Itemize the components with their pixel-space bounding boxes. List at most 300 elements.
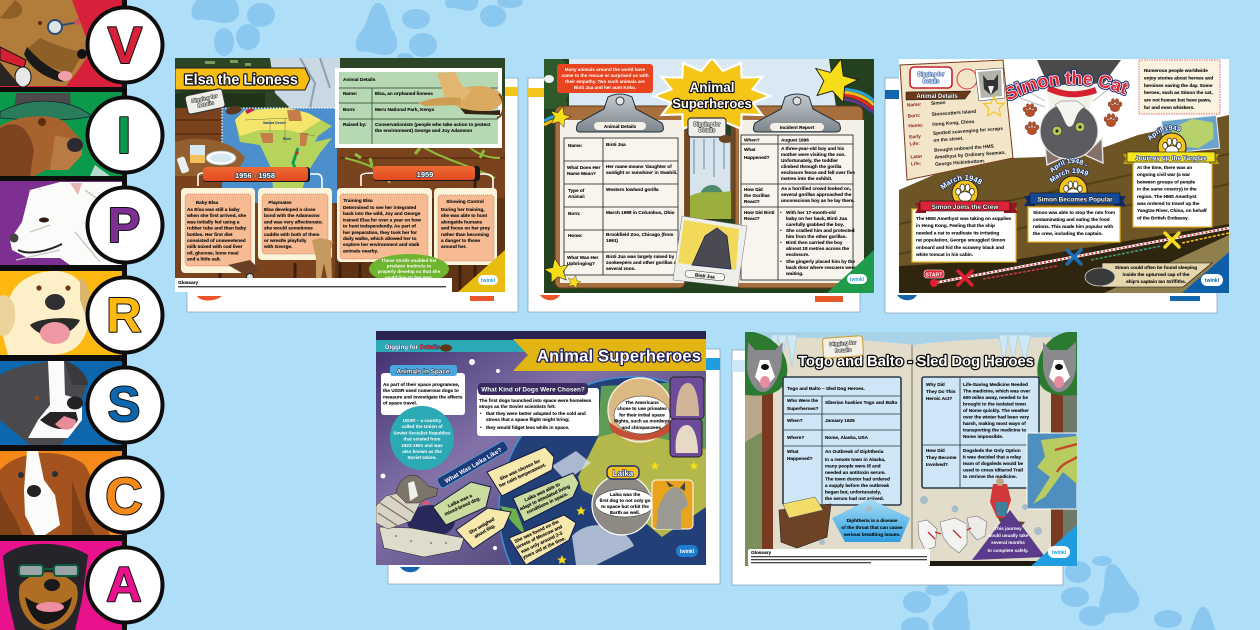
green callout: properly develop so that she <box>378 269 441 274</box>
twinkl corner <box>1030 525 1077 567</box>
tag: calm temperament: her calm temperament. <box>498 462 547 488</box>
story box: Journey up the Yangtze: between groups of people <box>1137 179 1195 184</box>
right incident table: climbed through the gorilla <box>781 164 842 169</box>
text box: what kind of dogs: stress that a space flight might bring; <box>486 417 570 422</box>
paper and ground background <box>899 59 1229 293</box>
intro card: fur and even whiskers. <box>1144 105 1195 110</box>
story box: Journey up the Yangtze: ongoing civil war (a war <box>1137 172 1190 177</box>
captain's cap note: inside the upturned cap of the <box>1123 272 1190 277</box>
strip: V red with airedale dog <box>0 0 122 87</box>
story box: Simon Joins the Crew <box>912 201 1018 262</box>
right table: team of dogsleds would be <box>963 461 1024 466</box>
Laika circle: first dog to not only go <box>599 498 651 503</box>
tag: weight: She weighed <box>468 516 496 535</box>
back sheet page 1 <box>187 78 518 312</box>
intro card: Numerous people worldwide <box>1144 68 1208 73</box>
digging for details badge <box>910 67 952 88</box>
left details table: What Was Her <box>567 255 599 260</box>
digging for details badge <box>822 336 864 358</box>
title banner <box>175 68 310 90</box>
left details table: Binti Jua <box>606 142 626 147</box>
digging for details badge: Digging for <box>918 72 944 78</box>
card: Baby Elsa: oil, glucose, bone meal <box>187 250 239 255</box>
back sheet page 2 <box>528 78 860 312</box>
primates circle: for their initial space <box>619 412 665 417</box>
start marker: START <box>926 272 943 278</box>
Laika circle: Earth as well. <box>610 510 640 515</box>
strip: C orange with spaniel <box>0 451 122 535</box>
card: Showing Control: around her. <box>441 244 467 249</box>
animal details table: Animal Details <box>343 77 376 82</box>
right table: over the winter had been very <box>963 414 1030 420</box>
story box: Journey up the Yangtze <box>1123 152 1219 227</box>
left details table: What Does Her <box>567 165 601 170</box>
card: Playmates: she would sometimes <box>264 226 313 231</box>
card: Baby Elsa: Baby Elsa <box>196 200 219 205</box>
story box: Journey up the Yangtze: Yangtze River, China, on behalf <box>1137 208 1207 213</box>
story box: Simon Becomes Popular: Simon Becomes Popular <box>1037 196 1113 204</box>
timeline header 1959: 1959 <box>417 170 433 179</box>
starburst title: Animal <box>689 80 735 95</box>
strip: I green with bloodhound <box>0 92 122 176</box>
twinkl corner: twinkl <box>1205 278 1220 284</box>
title: Simon the Cat <box>1006 70 1129 100</box>
tag: mixed-breed dog: mixed-breed dog. <box>444 496 481 517</box>
story box: Simon Joins the Crew: in Hong Kong. Feeling that the ship <box>916 223 995 228</box>
left table: January 1925 <box>825 418 855 423</box>
glossary strip: Glossary <box>178 280 198 285</box>
left table: Nome, Alaska, USA <box>825 435 869 440</box>
teal USSR circle: also known as the <box>402 449 442 454</box>
title banner: Elsa the Lioness <box>184 72 298 88</box>
card: Showing Control: she was able to hunt <box>441 213 488 218</box>
letter badge R <box>88 278 162 352</box>
card: Showing Control: rather than becoming <box>441 232 489 237</box>
letter badge A: A <box>106 558 142 612</box>
glossary strip: Glossary <box>751 550 771 555</box>
right incident table: several gorillas approached the <box>781 192 852 197</box>
teal USSR circle: USSR – a country <box>403 418 442 423</box>
date and paw: April 1949: April 1949 <box>1147 124 1182 142</box>
letter badge C: C <box>105 468 143 526</box>
card: Playmates: and was very affectionate; <box>264 219 323 224</box>
right incident table: • <box>780 259 782 264</box>
right incident table: waiting. <box>785 271 803 276</box>
digging for details badge: Digging for <box>829 340 856 348</box>
Laika illustration <box>376 475 464 557</box>
strip: R yellow with golden retriever <box>0 271 122 355</box>
text box: animals in space: the USSR used numerous dogs to <box>383 388 459 393</box>
animal details table: Meru National Park, Kenya <box>375 107 435 112</box>
primates circle: and chimpanzees. <box>622 425 662 430</box>
left table: Where? <box>787 435 804 440</box>
left details table: Home: <box>568 233 583 238</box>
left details table: Born: <box>568 211 581 216</box>
Laika circle: to space but orbit the <box>601 504 649 509</box>
left table: the serum had not arrived. <box>825 496 884 501</box>
right incident table: enclosure. <box>786 252 809 257</box>
story box: Simon Becomes Popular: Simon was able to stop the rats from <box>1033 210 1115 215</box>
right incident table: React? <box>744 216 760 221</box>
animal details table: Conservationists (people who take action to protect <box>375 122 491 127</box>
twinkl corner: twinkl <box>850 277 865 283</box>
right table <box>922 377 1039 488</box>
card: Training Elsa: daily walks, which allowed her to <box>343 236 417 241</box>
captain's cap note: Simon could often be found sleeping <box>1115 265 1197 270</box>
Laika circle: Laika <box>613 469 634 478</box>
waterfall scene <box>685 119 735 219</box>
animal details card: Simon <box>931 100 946 107</box>
digging for details badge: Details <box>835 347 852 355</box>
story box: Simon Joins the Crew: onboard and hid the scrawny black and <box>916 245 1004 250</box>
intro card <box>1139 60 1220 114</box>
right table: 600 miles away, needed to be <box>963 395 1028 400</box>
date and paw: March 1948 <box>940 174 983 201</box>
purple journey callout: several months <box>991 540 1025 545</box>
route markers <box>958 233 1179 285</box>
left table: many people were ill and <box>825 464 881 468</box>
tag: found on the streets: She was found on the <box>514 519 560 544</box>
story box: Journey up the Yangtze: region. The HMS Amethyst <box>1137 194 1197 199</box>
animal details card <box>900 60 1013 180</box>
right incident table: the Gorillas <box>744 193 770 198</box>
animal details table: Born: <box>343 107 356 112</box>
animal details card: Amethyst by Ordinary Seaman, <box>934 150 1007 161</box>
intro red box: Many animals around the world have <box>565 67 646 72</box>
strip: P purple with white dog <box>0 181 122 265</box>
sidebar: VIPERS dog strips <box>0 0 162 630</box>
card: Playmates: bond with the Adamsons <box>264 213 320 218</box>
panel: Togo and Balto sled dog heroes <box>745 332 1077 567</box>
story box: Simon Becomes Popular: contaminating and eating the food <box>1033 217 1110 222</box>
story box: Simon Joins the Crew: The HMS Amethyst was taking on supplies <box>916 216 1012 221</box>
right incident table <box>741 135 856 280</box>
Alaska map <box>1027 433 1077 509</box>
intro red box: come to the rescue or surprised us with <box>561 73 649 78</box>
card: Baby Elsa: when she first arrived, she <box>186 213 247 218</box>
text box: what kind of dogs <box>477 383 599 436</box>
intro red box: Binti Jua and her aunt Koko. <box>574 85 636 90</box>
map of Africa: River <box>283 137 292 141</box>
card: Playmates: or wrestle playfully <box>264 238 307 243</box>
letter badge I <box>88 98 162 172</box>
digging for details badge <box>688 118 733 143</box>
animal details card: Name: <box>907 102 922 109</box>
card: Baby Elsa: was initially fed using a <box>186 219 240 224</box>
letter badge C <box>88 458 162 532</box>
panel: Simon the Cat timeline <box>899 59 1229 293</box>
right table: Life-Saving Medicine Needed <box>963 382 1028 387</box>
card: Playmates: cuddle with both of them <box>264 232 319 237</box>
digging for details badge: Details <box>923 79 939 85</box>
text box: animals in space: Animals in Space <box>397 368 450 376</box>
story box: Journey up the Yangtze: of the British Embassy. <box>1137 215 1189 220</box>
rainbow <box>544 89 874 125</box>
left details table: Her name means 'daughter of <box>606 164 672 169</box>
glossary strip <box>748 549 930 566</box>
twinkl corner <box>1182 252 1229 293</box>
primates circle: The Americans <box>625 400 659 405</box>
card: Playmates: Playmates <box>268 200 292 205</box>
date and paw: April 1948 - March 1949 <box>1048 157 1089 204</box>
glossary strip <box>175 278 452 292</box>
right incident table: With her 17-month-old <box>786 210 836 215</box>
strip: A pink with rottweiler <box>0 541 122 630</box>
title banner <box>513 339 706 371</box>
right incident table: She gingerly placed him by the <box>786 259 855 264</box>
right table: The medicine, which was over <box>963 388 1030 394</box>
left table: Siberian huskies Togo and Balto <box>825 400 897 405</box>
card: Baby Elsa: and a little salt. <box>187 257 221 262</box>
digging for details badge: Details <box>699 128 715 134</box>
right incident table: • <box>780 228 782 233</box>
heading: What Was Laika Like?: What Was Laika Like? <box>444 447 503 485</box>
animal details card: Hong Kong, China <box>932 119 975 128</box>
book background <box>745 332 1077 566</box>
letter badge I: I <box>117 107 131 165</box>
wood background <box>175 58 505 292</box>
letter badge P: P <box>108 199 140 253</box>
monkey photos <box>670 377 704 457</box>
letter badge R: R <box>106 289 142 343</box>
story box: Journey up the Yangtze: was ordered to travel up the <box>1136 201 1200 206</box>
right incident table: carefully grabbed the boy. <box>786 222 844 227</box>
right incident table: As a horrified crowd looked on, <box>781 186 851 191</box>
husky portrait left <box>745 332 787 396</box>
heading: What Was Laika Like? <box>436 440 509 489</box>
card: Playmates <box>258 188 332 260</box>
letter badge S <box>88 368 162 442</box>
story box: Simon Becomes Popular: rations. This made him popular with <box>1033 224 1113 229</box>
digging for details badge: Digging for <box>191 93 218 105</box>
right incident table: metres into the exhibit. <box>781 176 832 181</box>
right incident table: React? <box>744 199 760 204</box>
left table: What <box>787 449 799 454</box>
right table: to retrieve the medicine. <box>963 474 1017 479</box>
sled dogs and musher <box>918 478 1025 553</box>
panel: Elsa the Lioness <box>175 58 505 292</box>
left clipboard: Animal Details <box>604 124 637 129</box>
left table: An Outbreak of Diphtheria <box>825 449 884 454</box>
jungle and sky background <box>544 59 874 293</box>
twinkl corner <box>827 250 874 293</box>
tag: found on the streets: streets of Moscow and <box>515 524 563 550</box>
card: Training Elsa: trained Elsa for over a year on how <box>343 217 421 222</box>
pentagon callout: Diphtheria is a disease <box>847 518 898 523</box>
snowflakes <box>819 496 1042 545</box>
animal details card: Stonecutters Island <box>931 109 976 118</box>
green callout: These strolls enabled her <box>381 258 437 263</box>
panel: Animal Superheroes space dogs <box>376 331 765 630</box>
card: Training Elsa: back into the wild, Joy and George <box>343 211 421 216</box>
card: Baby Elsa: milk mixed with cod liver <box>187 244 243 249</box>
right table: Nome impossible. <box>963 434 1003 439</box>
card: Training Elsa: Determined to see her integrated <box>343 205 416 210</box>
text box: what kind of dogs: • <box>480 411 482 416</box>
card: Training Elsa: Training Elsa <box>343 198 373 203</box>
right incident table: almost 18 metres across the <box>786 246 849 251</box>
right table: used to cross Iditarod Trail <box>963 468 1023 472</box>
left details table: several zoos. <box>606 266 635 271</box>
card: Showing Control: alongside humans <box>441 219 483 224</box>
right incident table: • <box>780 210 782 215</box>
purple journey callout: to complete safely. <box>987 548 1029 553</box>
left table: Happened? <box>787 456 813 461</box>
tag: weight <box>456 508 511 549</box>
right incident table: How Did Binti <box>744 210 774 215</box>
left table: a supply before the outbreak <box>825 483 889 488</box>
left table: needed an antitoxin serum. <box>825 470 886 475</box>
right incident table: When? <box>744 138 760 142</box>
teal USSR circle: Soviet Socialist Republics <box>393 430 451 435</box>
panel: Animal Superheroes clipboard report <box>543 53 874 293</box>
right clipboard: Incident Report <box>780 125 815 130</box>
right table: of Nome quickly. The weather <box>963 408 1029 413</box>
starburst title <box>654 58 770 134</box>
left details table: Upbringing? <box>567 261 595 266</box>
right incident table: How Did <box>744 187 763 192</box>
animal details card: Animal Details <box>916 94 958 100</box>
back sheet page 5 <box>732 350 1063 585</box>
stars on earth <box>557 462 698 564</box>
card: Training Elsa: explore her environment and stalk <box>343 242 420 247</box>
title: Simon the Cat <box>1006 69 1130 101</box>
date and paw: April 1948 - March 1949: April 1948 - <box>1050 157 1088 174</box>
story box: Simon Becomes Popular: the crew, including the captain. <box>1033 231 1103 236</box>
right table: Why Did <box>926 382 945 387</box>
space background and earth <box>376 331 765 630</box>
tag: found on the streets <box>509 515 576 565</box>
text box: animals in space: As part of their space programme, <box>383 382 459 387</box>
animal details card: Life: <box>909 141 920 147</box>
bottle and hand <box>228 260 260 278</box>
text box: what kind of dogs: • <box>480 425 482 430</box>
card: Training Elsa: her preparation, they took her for <box>343 230 417 235</box>
letter badge V: V <box>108 17 143 75</box>
card: Playmates: with George. <box>263 244 292 249</box>
purple journey callout: would usually take <box>987 533 1029 538</box>
card: Baby Elsa: bottles. Her first diet <box>187 232 233 237</box>
digging for details badge: Digging for <box>694 122 720 128</box>
animal details card: Born: <box>907 113 921 120</box>
letter badge P <box>88 188 162 262</box>
timeline header 1959 <box>361 166 493 188</box>
left details table: Western lowland gorilla <box>606 187 659 192</box>
timeline header 1956-1958: 1956 - 1958 <box>235 171 275 180</box>
card: Showing Control <box>434 188 497 265</box>
text box: what kind of dogs: The first dogs launched into space were homeless <box>479 398 592 403</box>
map of China <box>1161 115 1220 154</box>
tag: simulated living conditions: conditions in space. <box>526 491 569 515</box>
right incident table: him from the other gorillas. <box>786 234 847 239</box>
left details table: Binti Jua was largely raised by <box>606 254 675 259</box>
twinkl logo: twinkl <box>680 549 695 555</box>
digging for details strip: Digging for Details <box>385 344 441 351</box>
tag: calm temperament <box>487 447 554 496</box>
title: Togo and Balto - Sled Dog Heroes <box>798 353 1034 370</box>
left details table <box>564 138 678 275</box>
right incident table: August 1996 <box>781 138 809 142</box>
purple journey callout <box>972 510 1045 560</box>
left table: began but, unfortunately, <box>825 490 881 494</box>
animal details card: Early <box>909 134 921 141</box>
left details table: sunlight or sunshine' in Swahili. <box>606 170 677 175</box>
right incident table: • <box>780 240 782 245</box>
title banner: Animal Superheroes <box>537 348 701 366</box>
right incident table: back door where rescuers were <box>786 265 856 270</box>
simon photo <box>975 68 1005 101</box>
left details table: Animal: <box>568 194 586 199</box>
vines <box>344 148 500 184</box>
animal details table: Elsa, an orphaned lioness <box>375 91 433 96</box>
stars <box>543 53 862 289</box>
card: Training Elsa <box>337 188 432 262</box>
paw marks <box>1023 98 1122 135</box>
right incident table: What <box>744 147 756 152</box>
tag: mixed-breed dog <box>433 482 491 525</box>
intro card: heroines saving the day. Some <box>1144 83 1213 88</box>
animal details card: Life: <box>911 161 922 167</box>
left details table: March 1988 in Columbus, Ohio <box>606 210 675 215</box>
left details table: Name Mean? <box>567 171 596 176</box>
right table: They Do This <box>926 389 956 394</box>
pentagon callout: serious breathing issues. <box>844 532 900 537</box>
pentagon callout: of the throat that can cause <box>841 525 903 530</box>
animal details table: Raised by: <box>343 122 367 127</box>
story box: Simon Joins the Crew: white tomcat in his cabin. <box>915 252 973 257</box>
card: Baby Elsa: consisted of unsweetened <box>187 238 246 243</box>
back sheet page 3 <box>885 78 1217 313</box>
card: Showing Control: During her training, <box>441 207 484 212</box>
twinkl corner: twinkl <box>481 278 496 284</box>
polaroid of Binti Jua: Binti Jua <box>695 272 715 280</box>
card: Baby Elsa <box>181 188 255 273</box>
date and paw: April 1948 - March 1949: March 1949 <box>1048 168 1089 184</box>
animal details card: Spotted scavenging for scraps <box>933 126 1003 137</box>
story box: Simon Joins the Crew: needed a cat to eradicate its irritating <box>916 230 999 235</box>
right incident table: baby on her back, Binti Jua <box>786 216 847 221</box>
right incident table: Happened? <box>744 155 770 160</box>
twinkl corner: twinkl <box>1052 550 1067 556</box>
right incident table: unconscious boy as he lay there. <box>781 198 855 203</box>
animal details table: Name: <box>343 91 358 96</box>
teal USSR circle: Soviet Union. <box>407 455 437 460</box>
text box: animals in space: of space travel. <box>383 401 417 406</box>
right incident table: Unfortunately, the toddler <box>781 158 838 163</box>
left details table: zookeepers and other gorillas at <box>606 260 678 265</box>
road and route lines <box>934 228 1229 283</box>
lion cub <box>312 238 333 280</box>
tag: simulated living conditions: Laika was able to <box>524 482 561 503</box>
primates circle <box>608 378 672 442</box>
card: Training Elsa: to hunt independently. As part of <box>343 224 416 229</box>
story box: Simon Joins the Crew: Simon Joins the Crew <box>932 204 998 211</box>
left clipboard <box>555 94 685 288</box>
right incident table: mother were visiting the zoo. <box>781 152 846 157</box>
left table: Superheroes? <box>787 406 819 411</box>
right table: brought to the isolated town <box>963 402 1026 406</box>
map of Africa: Sahara Desert <box>263 121 287 125</box>
card: Training Elsa: animals nearby. <box>343 248 378 253</box>
left table: Who Were the <box>787 398 819 403</box>
tag: simulated living conditions <box>513 473 579 522</box>
story box: Journey up the Yangtze: Journey up the Yangtze <box>1135 155 1207 162</box>
strip: S blue with border collie <box>0 361 122 445</box>
tag: weight: about 6kg. <box>473 523 496 539</box>
start marker <box>924 270 944 287</box>
left table: When? <box>787 418 803 423</box>
cat illustration <box>1017 60 1121 165</box>
